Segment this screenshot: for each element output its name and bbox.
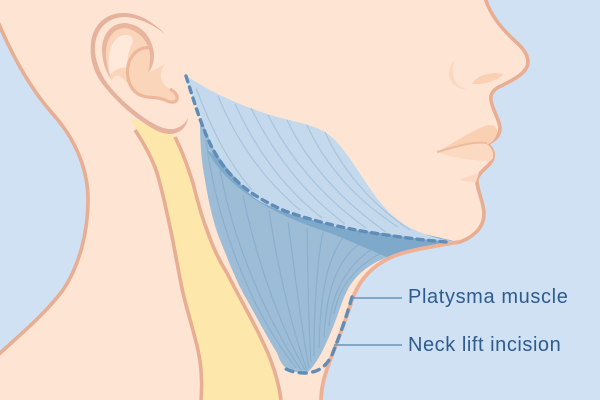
ear conch fill bbox=[103, 25, 177, 102]
ear bbox=[91, 13, 188, 134]
shadow under lip bbox=[459, 173, 479, 182]
lip line bbox=[437, 143, 487, 152]
dark overlap band bbox=[207, 150, 458, 257]
yellow layer right outline bbox=[175, 137, 281, 400]
neck lift incision: dashed line bbox=[186, 76, 447, 242]
lower platysma muscle bbox=[200, 120, 458, 372]
ear inner helix bbox=[102, 23, 154, 80]
nose wing bbox=[449, 61, 465, 89]
yellow neck fat layer bbox=[130, 118, 281, 400]
label: platysma muscle: Platysma muscle bbox=[408, 286, 568, 308]
yellow layer left outline bbox=[135, 130, 202, 400]
neck back outline bbox=[0, 22, 88, 355]
leader line: platysma muscle bbox=[352, 297, 402, 299]
nostril bbox=[472, 73, 503, 84]
neck front outline bbox=[321, 242, 458, 400]
face profile outline bbox=[456, 0, 528, 243]
lower lip bbox=[437, 144, 493, 161]
lower muscle fibres bbox=[206, 140, 405, 370]
upper muscle fibres bbox=[196, 88, 410, 232]
ear outer helix bbox=[91, 13, 188, 134]
leader line: neck lift incision bbox=[334, 344, 402, 346]
label: neck lift incision: Neck lift incision bbox=[408, 334, 561, 356]
lower incision: dashed line bbox=[286, 297, 352, 373]
ear inner light area bbox=[109, 35, 133, 75]
upper platysma muscle bbox=[185, 75, 458, 242]
ear conch outline bbox=[127, 48, 177, 102]
upper lip bbox=[437, 125, 497, 152]
